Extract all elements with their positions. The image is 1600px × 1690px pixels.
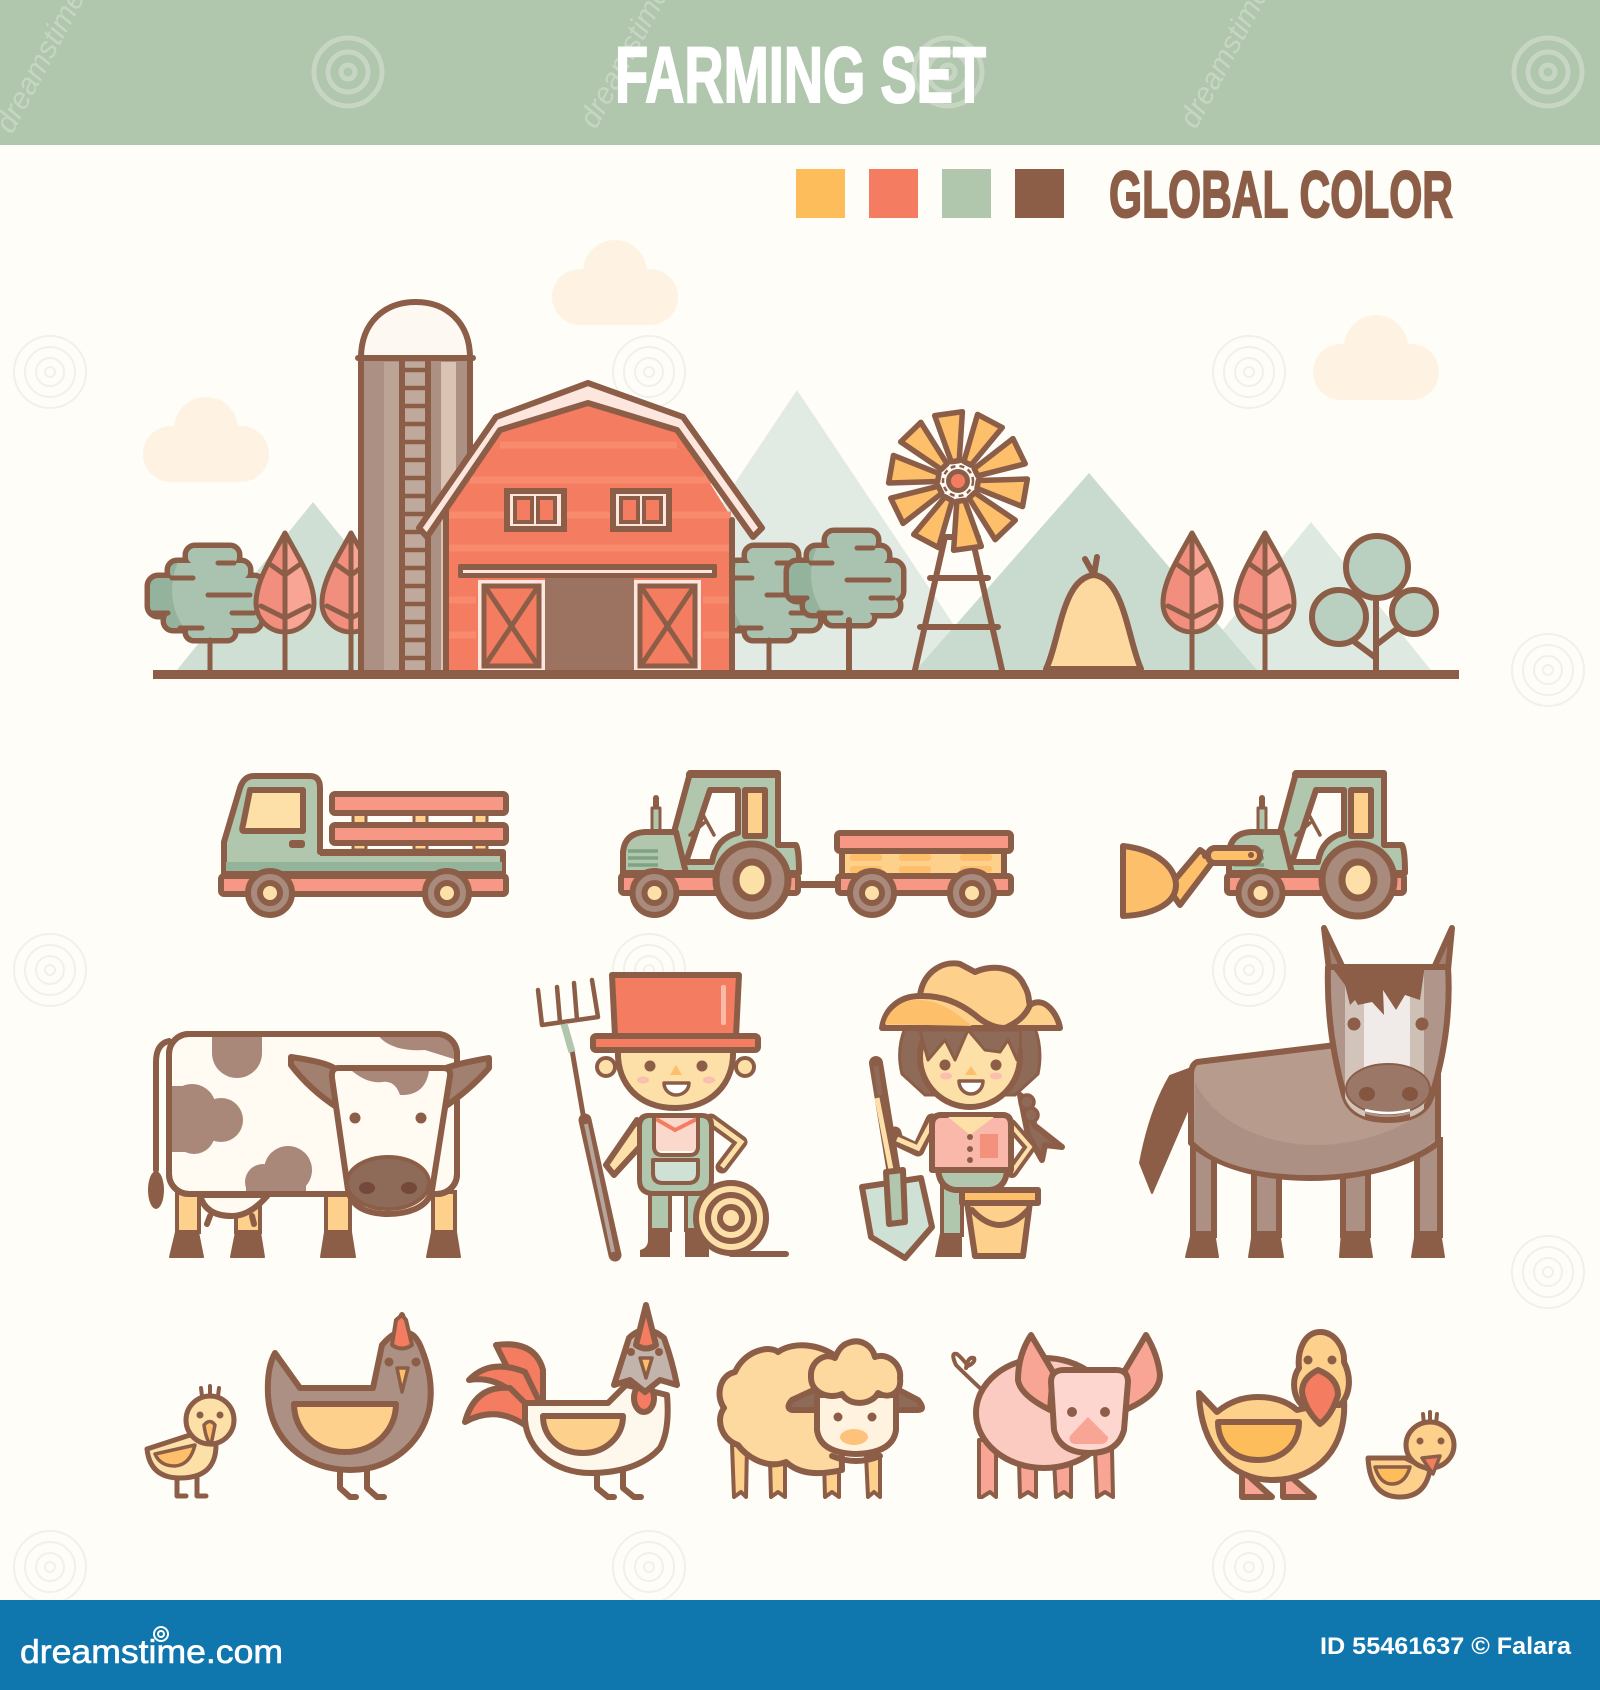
woman head (920, 1007, 1020, 1107)
windmill (889, 412, 1027, 670)
duck wing (1218, 1422, 1299, 1460)
pig (953, 1335, 1160, 1497)
duck body (1199, 1393, 1344, 1480)
rooster wattle (634, 1384, 654, 1412)
clouds (143, 240, 1439, 482)
duckling (1368, 1412, 1454, 1497)
braid (1020, 1095, 1062, 1160)
horse tail (1140, 1066, 1197, 1193)
barn roof (419, 383, 762, 537)
horse legs (1193, 1140, 1440, 1235)
footer bar (0, 1600, 1600, 1690)
faint watermark spirals (14, 336, 1584, 1603)
header banner (0, 0, 1600, 145)
hen (268, 1315, 431, 1497)
hay roll (696, 1183, 766, 1253)
sheep legs (732, 1445, 880, 1497)
cow (148, 1034, 489, 1257)
haystack (1046, 557, 1141, 669)
tractor with trailer (621, 771, 1011, 916)
straw hat (882, 963, 1060, 1028)
left trees (145, 524, 380, 670)
cow ears (291, 1057, 338, 1108)
rooster legs (597, 1470, 641, 1497)
horse (1140, 928, 1452, 1257)
farmer arms (606, 1120, 646, 1175)
footer image id: ID 55461637 © Falara (1320, 1633, 1572, 1660)
duck beak (1302, 1370, 1338, 1424)
pitchfork (538, 980, 615, 1255)
sheep wool body (720, 1345, 842, 1473)
pig head (1051, 1370, 1128, 1453)
duck feet (1242, 1470, 1272, 1497)
rooster head (614, 1330, 677, 1392)
pig ears (1018, 1335, 1053, 1410)
red barn (419, 383, 762, 670)
ground line (153, 670, 1459, 679)
farmer overalls (640, 1116, 711, 1193)
trailer (837, 833, 1011, 915)
flatbed truck (221, 776, 506, 915)
title: FARMING SET (615, 30, 986, 119)
farmer head (597, 1058, 615, 1076)
shovel (862, 1063, 932, 1258)
horse snout (1346, 1064, 1430, 1114)
right trees behind barn (704, 509, 943, 670)
rooster wing (543, 1416, 623, 1453)
sheep face (817, 1395, 896, 1454)
cow legs (170, 1192, 460, 1257)
sheep (720, 1341, 922, 1497)
woman leg (942, 1185, 962, 1235)
global colour legend (796, 157, 1453, 231)
duck (1199, 1332, 1349, 1497)
horse body (1191, 1045, 1438, 1178)
sheep head wool (811, 1341, 900, 1403)
sheep ears (788, 1388, 818, 1410)
hitch (798, 881, 838, 888)
farmer legs (640, 1190, 709, 1257)
cow body (169, 1034, 457, 1194)
woman left arm (895, 1120, 932, 1150)
chick (147, 1386, 234, 1496)
female farmer (862, 963, 1062, 1258)
udder (200, 1195, 268, 1216)
barn main door (545, 578, 634, 670)
plaid shirt (656, 1118, 697, 1151)
footer spiral icon (154, 1627, 168, 1641)
horse head (1328, 967, 1449, 1120)
woman right arm (1011, 1125, 1030, 1172)
right leaf trees (1163, 533, 1294, 670)
barn right door (634, 580, 701, 670)
farm landscape scene (143, 240, 1459, 679)
cow head (332, 1068, 450, 1214)
top hat (612, 975, 739, 1036)
pig snout (1070, 1417, 1108, 1444)
rooster body (525, 1385, 668, 1473)
hair back (900, 1028, 1040, 1095)
barn left door (478, 580, 545, 670)
shorts (938, 1170, 1007, 1190)
mountains (177, 390, 1431, 670)
barn lintel (458, 564, 717, 578)
round tree (1312, 536, 1436, 670)
pig legs (979, 1440, 1113, 1497)
rooster (465, 1305, 677, 1497)
shirt (932, 1115, 1011, 1170)
loader arm (1168, 850, 1214, 905)
footer logo text: dreamstime.com (20, 1633, 283, 1670)
bucket (962, 1190, 1038, 1256)
pig tail (953, 1354, 982, 1390)
silo ladder (402, 362, 428, 670)
loader bucket (1123, 846, 1176, 916)
male farmer (538, 975, 786, 1257)
horse ears (1324, 928, 1344, 970)
cow spots (172, 1037, 454, 1191)
silo (358, 302, 473, 670)
cow snout (347, 1157, 429, 1209)
barn windows (504, 488, 672, 532)
duck head (1294, 1332, 1349, 1405)
front loader tractor (1123, 771, 1405, 916)
tail feathers (465, 1344, 543, 1425)
pig body (976, 1358, 1112, 1468)
